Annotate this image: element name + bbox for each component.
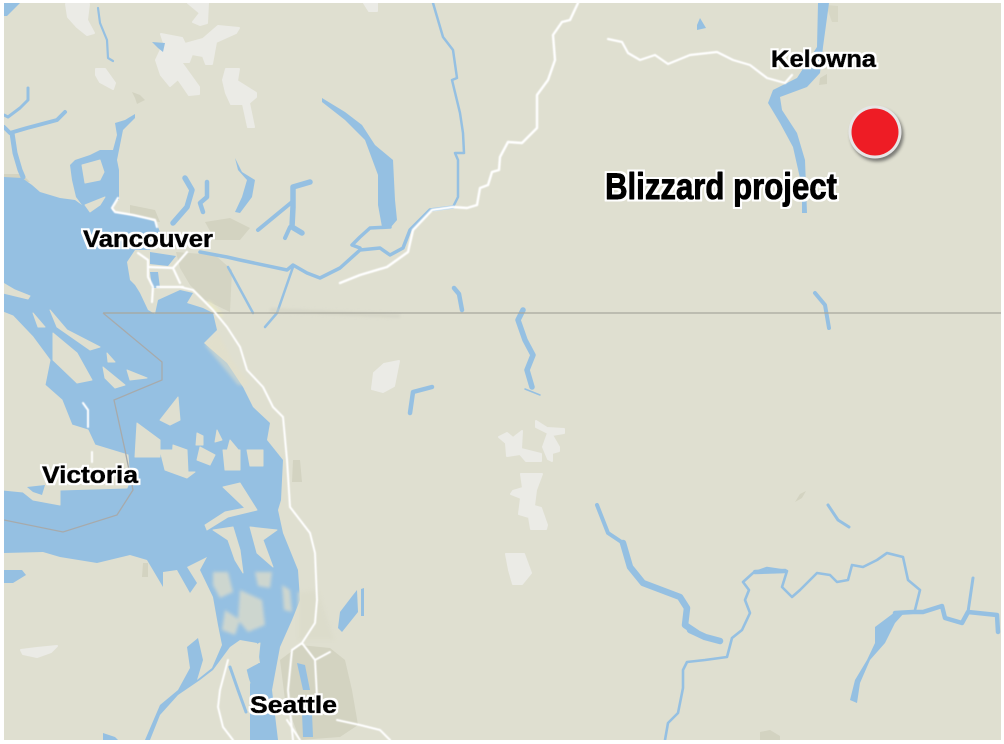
water: Port Angeles bay xyxy=(4,570,26,583)
lake: Lake Chelan style reservoir xyxy=(850,612,905,703)
lake: Okanagan xyxy=(768,3,829,213)
blurred Puget Sound islands xyxy=(212,570,300,636)
water: top-left corner bay xyxy=(4,3,20,16)
blurred delta near border xyxy=(204,302,280,386)
lake: Lake Washington xyxy=(297,663,310,690)
lake: Harrison xyxy=(322,98,397,227)
US Canada land border xyxy=(103,312,1001,314)
land: Vancouver Island and islands xyxy=(3,160,277,683)
roads xyxy=(83,3,792,740)
city label: Vancouver: Vancouver xyxy=(83,226,213,253)
lake: small pond near Kelowna xyxy=(697,18,706,30)
lake: Samish east xyxy=(338,590,358,632)
city label: Seattle: Seattle xyxy=(250,692,337,719)
water: Howe Sound inlet xyxy=(70,114,135,205)
water: Victoria harbour xyxy=(27,485,45,495)
water: bottom channel xyxy=(103,733,118,740)
maritime border xyxy=(4,313,162,532)
project location marker xyxy=(848,106,904,162)
city label: Kelowna: Kelowna xyxy=(771,46,877,73)
lake: upper mountain xyxy=(152,42,165,52)
lake: coastal mountains xyxy=(235,158,255,213)
project label: Blizzard project: Blizzard project xyxy=(605,166,837,207)
snow and glacier patches xyxy=(21,3,564,657)
city label: Victoria: Victoria xyxy=(42,462,139,489)
water: Burrard Inlet channels xyxy=(150,252,176,288)
